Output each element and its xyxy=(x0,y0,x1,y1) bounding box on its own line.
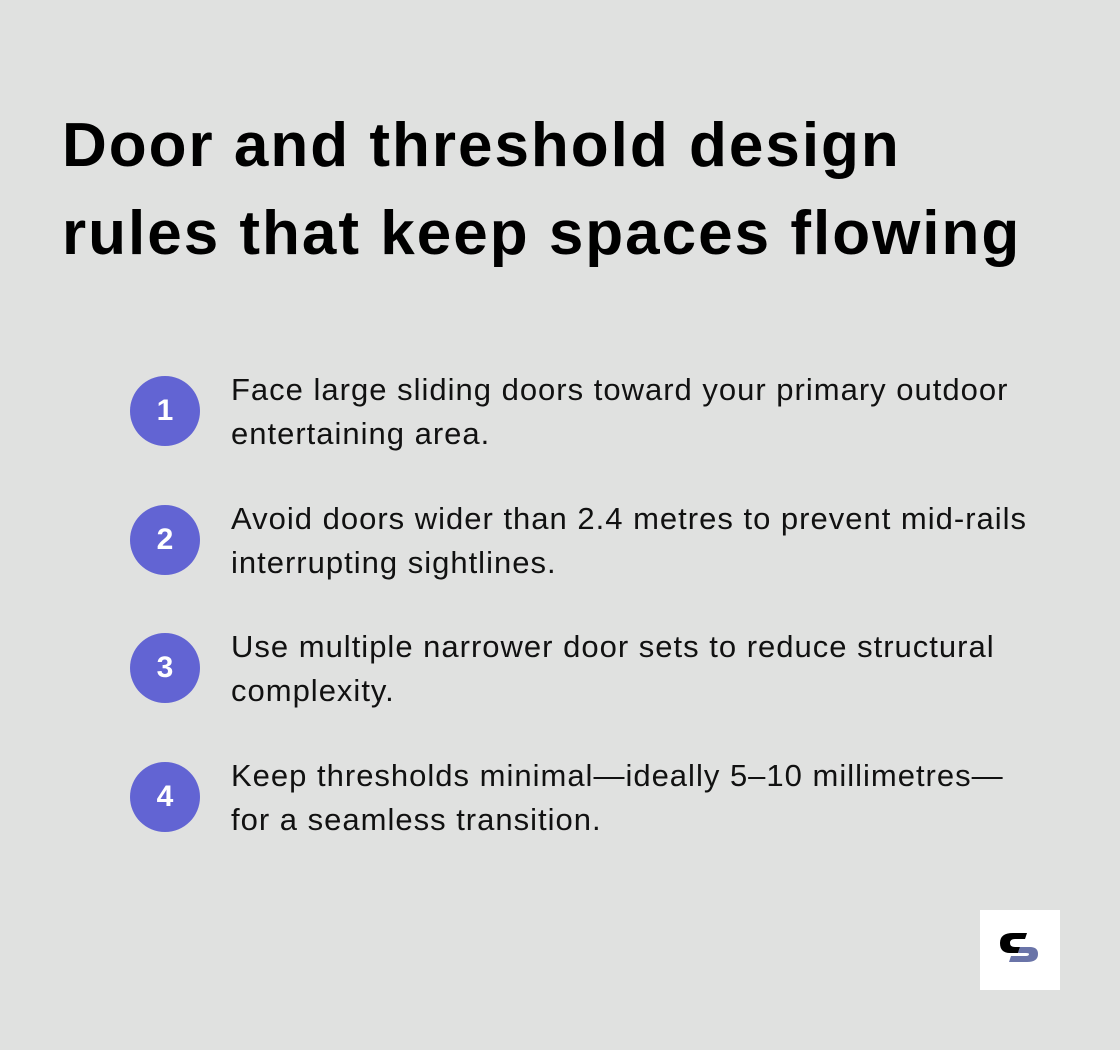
item 1 xyxy=(130,372,1008,451)
badge 3 xyxy=(130,633,200,703)
badge 2 xyxy=(130,505,200,575)
title: Door and threshold design xyxy=(62,111,901,180)
item 3 xyxy=(130,629,995,708)
title: rules that keep spaces flowing xyxy=(62,199,1021,268)
badge 1: 1 xyxy=(157,394,173,427)
text 1: entertaining area. xyxy=(231,416,490,451)
text 1 xyxy=(231,372,1008,451)
badge 4: 4 xyxy=(157,780,173,813)
badge 2: 2 xyxy=(157,523,173,556)
item 2 xyxy=(130,501,1027,580)
text 3: Use multiple narrower door sets to reduce structural xyxy=(231,629,995,664)
text 4: for a seamless transition. xyxy=(231,802,602,837)
item 4 xyxy=(130,758,1004,837)
badge 1 xyxy=(130,376,200,446)
title xyxy=(62,111,1021,268)
text 2 xyxy=(231,501,1027,580)
badge 4 xyxy=(130,762,200,832)
text 2: Avoid doors wider than 2.4 metres to prevent mid-rails xyxy=(231,501,1027,536)
text 4: Keep thresholds minimal—ideally 5–10 millimetres— xyxy=(231,758,1004,793)
text 4 xyxy=(231,758,1004,837)
text 1: Face large sliding doors toward your primary outdoor xyxy=(231,372,1008,407)
badge 3: 3 xyxy=(157,651,173,684)
logo xyxy=(980,910,1060,990)
text 3: complexity. xyxy=(231,673,395,708)
text 2: interrupting sightlines. xyxy=(231,545,557,580)
text 3 xyxy=(231,629,995,708)
